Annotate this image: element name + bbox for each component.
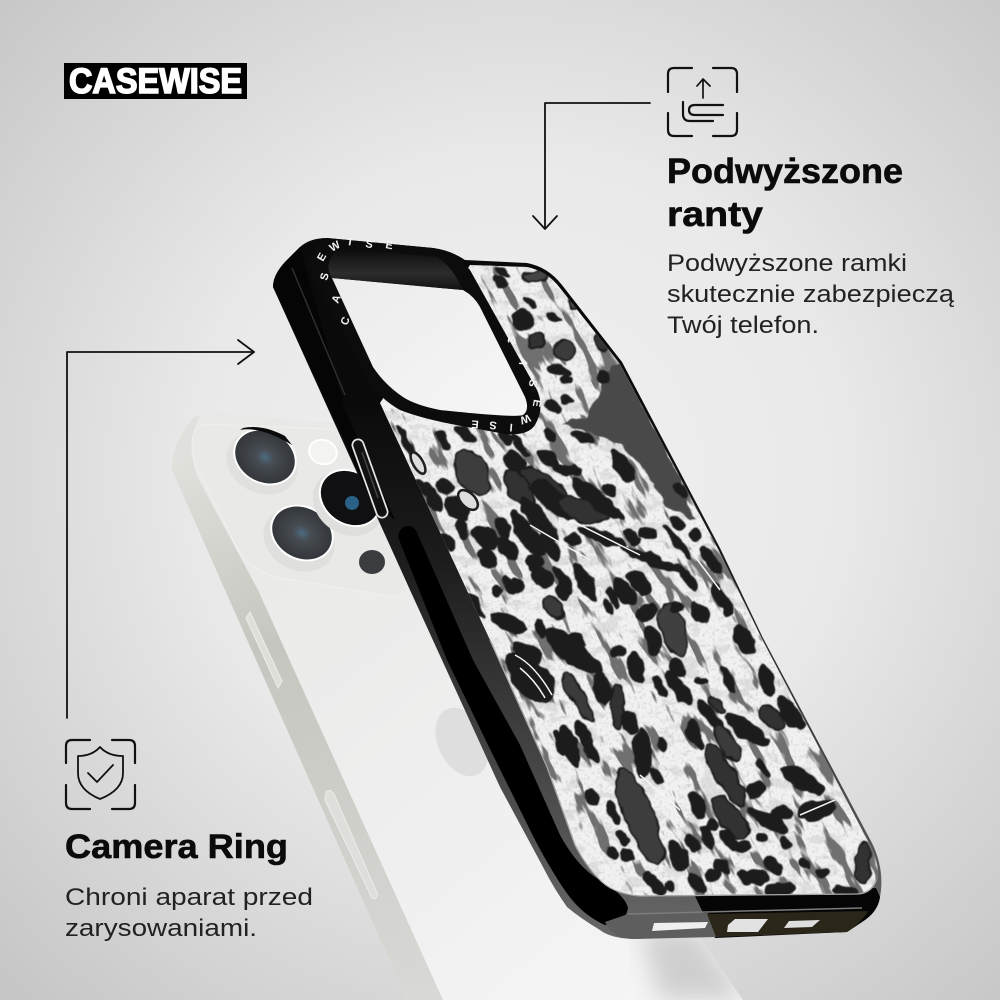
logo text: CASEWISE: [69, 62, 242, 101]
flash: [306, 436, 340, 468]
ring text lower: CASEWISE: [471, 334, 543, 433]
ring opening: [332, 278, 527, 416]
side buttons: [246, 612, 377, 898]
white iPhone: [172, 413, 745, 1000]
lens top: [215, 418, 309, 507]
icon: raised edges: [668, 68, 737, 136]
marble pattern: [380, 265, 878, 896]
apple logo ghost: [425, 699, 499, 785]
case side slot: [398, 526, 628, 925]
side highlight: [292, 268, 345, 395]
dark ellipses: [395, 265, 871, 899]
heading: raised edges: Podwyższone: [667, 152, 903, 191]
lidar: [359, 550, 385, 574]
dark wash region: [560, 362, 695, 520]
marble texture: [370, 255, 890, 905]
camera plateau: [192, 424, 407, 596]
text: raised edges description: skutecznie zabezpieczą: [667, 281, 955, 308]
organic dark swirls: [390, 266, 878, 896]
screen bezel highlight: [490, 640, 876, 896]
black case: [273, 238, 882, 939]
heading: raised edges: ranty: [667, 195, 764, 234]
heading: raised edges: [667, 152, 903, 234]
bottom edge right: [695, 888, 880, 938]
text: raised edges description: [667, 250, 955, 339]
text: raised edges description: Twój telefon.: [667, 312, 819, 339]
icon: shield: [66, 740, 135, 809]
phone side band: [172, 416, 443, 1000]
lens right: [300, 456, 396, 550]
text: raised edges description: Podwyższone ramki: [667, 250, 907, 277]
phone body: [172, 413, 743, 1000]
camera ring: [309, 236, 543, 434]
marble grain: [370, 255, 890, 905]
volume button: [358, 445, 382, 512]
ring text: CASEWISE: [315, 236, 394, 327]
arrow: top: [533, 103, 650, 229]
shadow under case: [636, 938, 742, 1000]
logo: [64, 62, 247, 101]
heading: camera ring: Camera Ring: [65, 828, 288, 866]
speaker ports: [652, 919, 820, 932]
lens bottom: [252, 494, 346, 584]
white veins: [408, 450, 835, 815]
ring outer: [309, 238, 541, 434]
text: camera ring description: Chroni aparat przed: [65, 884, 313, 911]
arrow: left: [67, 340, 254, 718]
text: camera ring description: [65, 884, 313, 942]
ring inner wall: [328, 248, 463, 290]
text: camera ring description: zarysowaniami.: [65, 915, 257, 942]
logo box: [64, 63, 247, 99]
upper side shading: [273, 247, 395, 520]
marble base: [370, 255, 890, 905]
case body: [273, 238, 881, 939]
bottom port strip: [605, 908, 868, 939]
